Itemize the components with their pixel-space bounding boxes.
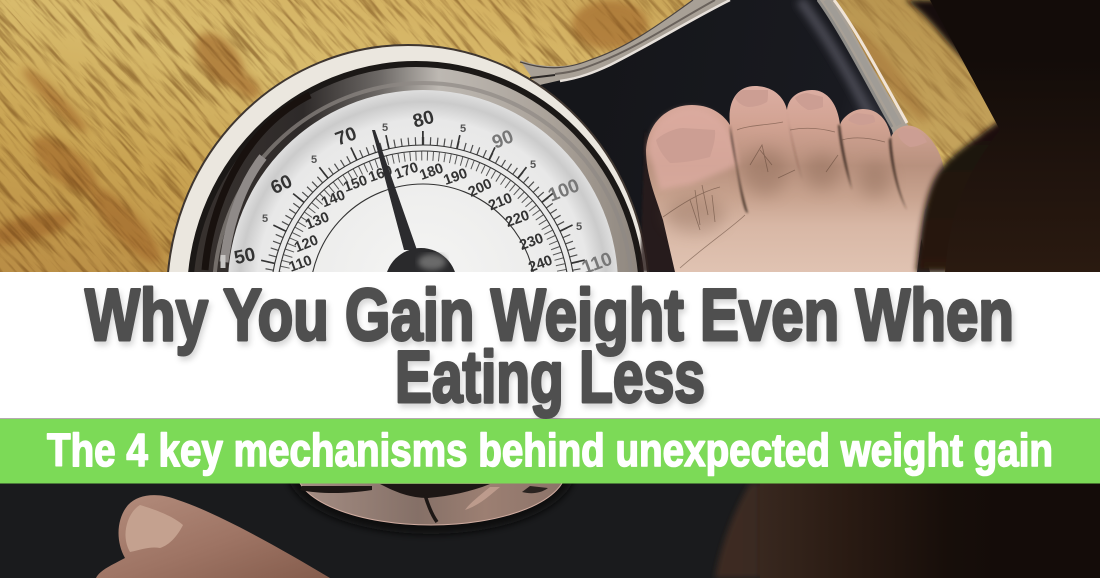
scale rings and ticks [261,131,585,272]
photo: bathroom scale on wood floor [0,0,1100,272]
outer scale numbers: 50 [232,244,257,269]
inner scale numbers: 130 [303,209,332,233]
outer scale numbers: 110 [579,249,615,279]
foot on the scale [646,86,945,272]
scale dial [167,44,649,272]
scale platform [520,0,945,272]
outer ring [167,44,649,272]
inner scale numbers: 180 [418,161,446,184]
chrome ring [188,61,644,272]
small five marks [262,122,582,233]
foreground toe at lower left [96,495,330,578]
dark area beside the foot [639,136,675,272]
hub [387,248,455,272]
white title band [0,272,1100,420]
toe creases and hair [663,122,885,268]
title [85,275,1014,418]
wood floor [0,0,1100,272]
inner scale numbers: 190 [442,166,470,189]
inner scale numbers: 230 [518,231,546,254]
green subtitle band [0,419,1100,484]
outer scale numbers: 80 [411,107,437,133]
lighter big toe [648,108,738,190]
inner scale numbers: 150 [342,173,370,196]
inner scale numbers: 120 [292,232,321,256]
inner scale numbers [287,160,555,276]
inner scale numbers: 240 [527,253,555,276]
toenails [656,90,927,163]
small five marks: 5 [576,221,582,233]
title: Eating Less [395,337,705,418]
inner scale numbers: 220 [504,208,532,231]
chrome reflection under dial [288,484,574,536]
outer scale numbers [232,107,615,279]
foot silhouette [646,86,945,272]
outer scale numbers: 90 [489,126,517,154]
inner scale numbers: 170 [393,160,421,183]
needle [372,130,417,250]
inner scale numbers: 110 [287,253,314,276]
lower photo: dark platform with toe [96,484,1100,578]
outer scale numbers: 100 [545,175,583,207]
dial face [228,90,618,272]
inner scale numbers: 200 [466,176,495,201]
inner scale numbers: 210 [486,190,515,214]
blurred foreground shadow [905,0,1100,272]
muted wood at right [837,0,996,156]
small five marks: 5 [460,123,466,135]
shadow creases between toes [728,124,907,214]
shading at toe bases [665,148,891,233]
small five marks: 5 [382,122,388,134]
outer scale numbers: 70 [333,123,360,150]
small five marks: 5 [530,159,536,171]
outer scale numbers: 60 [268,171,296,199]
small five marks: 5 [311,154,317,166]
inner scale numbers: 140 [319,187,348,211]
inner scale numbers: 160 [367,163,395,186]
blurred foreground shadow at lower right [715,483,1100,578]
small five marks: 5 [262,213,268,225]
dark wood blotches [0,0,934,272]
